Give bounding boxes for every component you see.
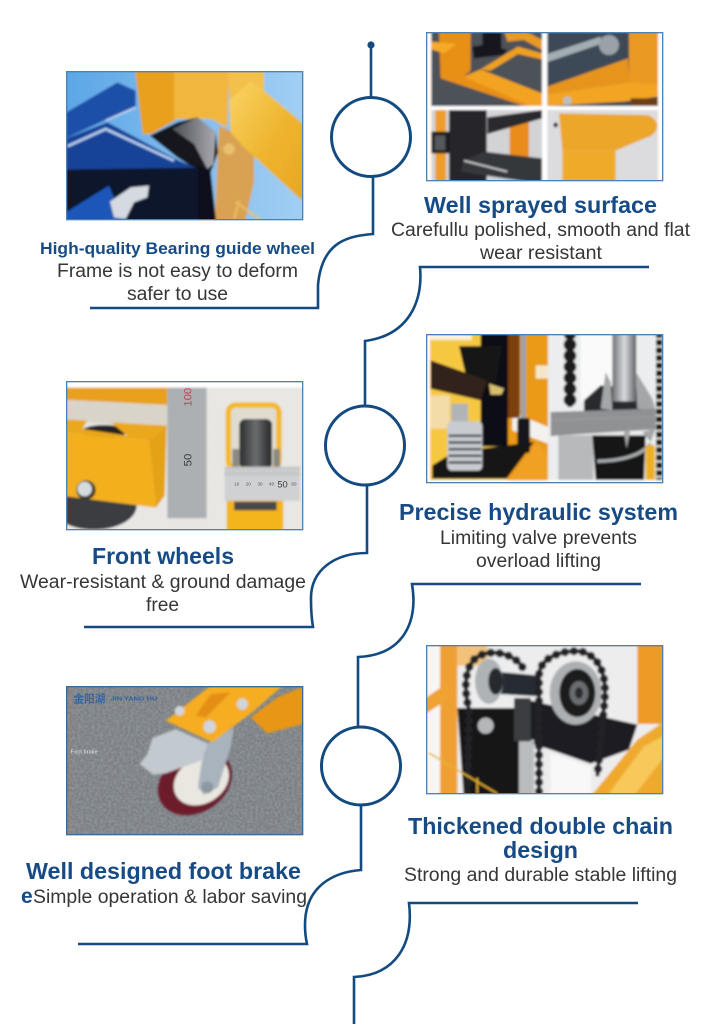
ruler labels: 50 xyxy=(277,480,288,490)
photo: hydraulic pump and caliper xyxy=(426,334,664,484)
description xyxy=(57,261,298,305)
logo: JIN YANG HU xyxy=(111,697,157,703)
heading: Well sprayed surface xyxy=(424,192,657,218)
ruler labels: 20 xyxy=(246,482,251,487)
photo: caster with foot brake on asphalt xyxy=(67,684,309,835)
description xyxy=(391,220,691,264)
connector: curve to left rule, section 1 xyxy=(90,176,373,308)
connector: curve to left rule, section 3 xyxy=(78,805,361,944)
ruler labels xyxy=(182,388,297,490)
heading: design xyxy=(503,837,578,863)
connector: curve to left rule, section 2 xyxy=(84,485,367,627)
panel: hydraulic system xyxy=(399,329,678,572)
heading: Front wheels xyxy=(92,543,234,569)
ruler labels: 10 xyxy=(234,482,240,487)
heading xyxy=(408,813,673,863)
description: Strong and durable stable lifting xyxy=(404,865,677,886)
panel: bearing guide wheel xyxy=(40,66,315,305)
heading: Thickened double chain xyxy=(408,813,673,839)
connector: curve from right rule to page bottom xyxy=(354,903,638,1024)
description: e xyxy=(21,885,33,908)
description xyxy=(440,528,637,572)
description: free xyxy=(146,595,179,616)
ruler labels: 30 xyxy=(257,482,263,487)
circle marker 2 xyxy=(326,406,404,485)
photo: bearing guide wheel close-up xyxy=(66,71,304,220)
panel: well sprayed surface xyxy=(391,27,691,264)
bottom-right xyxy=(547,110,658,184)
right half xyxy=(548,332,669,480)
top-left xyxy=(431,30,542,106)
photo caption: Foot brake xyxy=(71,750,98,756)
top-right xyxy=(547,30,658,106)
circle marker 3 xyxy=(322,727,400,805)
ruler labels: 40 xyxy=(269,482,275,487)
panel: front wheels xyxy=(20,376,309,616)
heading: High-quality Bearing guide wheel xyxy=(40,239,315,258)
photo: double chain sprockets xyxy=(426,645,664,794)
ruler labels: 100 xyxy=(182,388,194,407)
description: Carefullu polished, smooth and flat xyxy=(391,220,691,241)
connector: curve from right rule to third circle xyxy=(358,584,641,727)
panel: double chain xyxy=(404,640,677,886)
panel: foot brake xyxy=(21,684,309,908)
description: Frame is not easy to deform xyxy=(57,261,298,282)
description: wear resistant xyxy=(479,243,603,264)
description xyxy=(20,572,306,616)
connector: curve from right rule to second circle xyxy=(365,267,649,406)
connector: top timeline with start dot and first circle xyxy=(332,41,410,177)
description: Limiting valve prevents xyxy=(440,528,637,549)
ruler labels: 50 xyxy=(182,454,194,466)
logo: 金阳湖 xyxy=(73,693,106,706)
description: Wear-resistant & ground damage xyxy=(20,572,306,593)
heading: Precise hydraulic system xyxy=(399,499,678,525)
photo: front wheel with rulers xyxy=(66,381,304,530)
logo xyxy=(73,693,157,706)
description: Simple operation & labor saving xyxy=(33,887,307,908)
ruler labels: 60 xyxy=(291,482,297,487)
description: safer to use xyxy=(127,284,228,305)
description: overload lifting xyxy=(476,551,601,572)
photo: four sprayed surface details xyxy=(426,32,664,182)
bottom-left xyxy=(431,110,542,184)
heading: Well designed foot brake xyxy=(26,858,301,884)
